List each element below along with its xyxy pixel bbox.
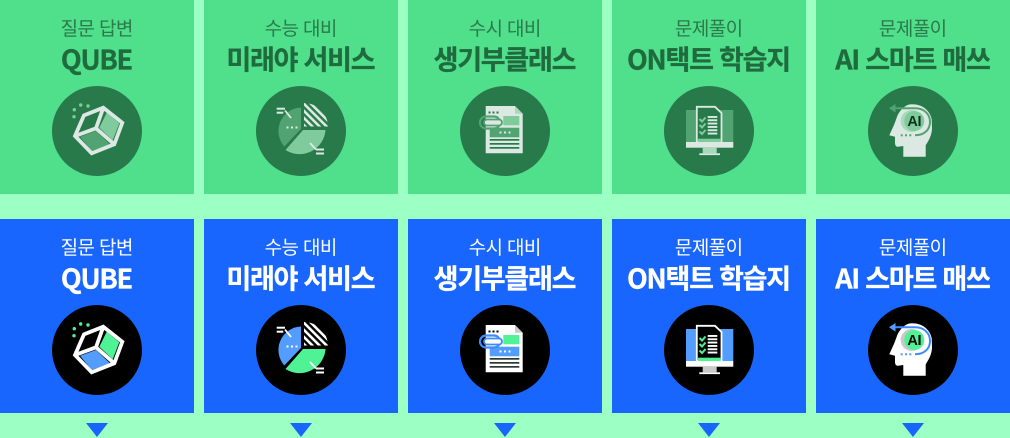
- heading: ON택트 학습지: [627, 258, 790, 296]
- icon: monitor with checklist: [664, 86, 754, 176]
- heading: 미래야 서비스: [226, 38, 375, 78]
- subtitle: 수능 대비: [265, 233, 337, 260]
- arrow: 미래야 서비스: [290, 423, 312, 437]
- heading: QUBE: [61, 38, 132, 78]
- bottom row: [0, 219, 1010, 413]
- subtitle: 문제풀이: [879, 233, 946, 260]
- panel: 생기부클래스 (green): [408, 0, 602, 194]
- top row: [0, 0, 1010, 194]
- icon: monitor with checklist: [664, 305, 754, 395]
- subtitle: 수시 대비: [469, 14, 541, 41]
- subtitle: 문제풀이: [879, 14, 946, 41]
- label: AI: AI: [907, 114, 922, 130]
- icon: pie chart: [256, 305, 346, 395]
- arrow: QUBE: [86, 423, 108, 437]
- icon: document with clip: [460, 305, 550, 395]
- arrow: AI 스마트 매쓰: [902, 423, 924, 437]
- icon: AI head: [868, 305, 958, 395]
- panel: QUBE (green): [0, 0, 194, 194]
- subtitle: 질문 답변: [61, 233, 133, 260]
- arrow: 생기부클래스: [494, 423, 516, 437]
- panel: QUBE (blue): [0, 219, 194, 413]
- subtitle: 질문 답변: [61, 14, 133, 41]
- heading: QUBE: [61, 258, 132, 296]
- panel: ON택트 학습지 (green): [612, 0, 806, 194]
- icon: pie chart: [256, 86, 346, 176]
- panel: AI 스마트 매쓰 (blue): [816, 219, 1010, 413]
- panel: 생기부클래스 (blue): [408, 219, 602, 413]
- heading: 미래야 서비스: [226, 258, 375, 296]
- icon: cube: [52, 305, 142, 395]
- subtitle: 문제풀이: [675, 233, 742, 260]
- icon: AI head: [868, 86, 958, 176]
- heading: 생기부클래스: [434, 258, 576, 296]
- subtitle: 문제풀이: [675, 14, 742, 41]
- arrow: ON택트 학습지: [698, 423, 720, 437]
- subtitle: 수능 대비: [265, 14, 337, 41]
- panel: ON택트 학습지 (blue): [612, 219, 806, 413]
- heading: 생기부클래스: [434, 38, 576, 78]
- panel: 미래야 서비스 (green): [204, 0, 398, 194]
- panel: AI 스마트 매쓰 (green): [816, 0, 1010, 194]
- icon: cube: [52, 86, 142, 176]
- label: AI: AI: [907, 333, 922, 349]
- icon: document with clip: [460, 86, 550, 176]
- subtitle: 수시 대비: [469, 233, 541, 260]
- heading: AI 스마트 매쓰: [834, 38, 990, 78]
- heading: AI 스마트 매쓰: [834, 258, 990, 296]
- panel: 미래야 서비스 (blue): [204, 219, 398, 413]
- heading: ON택트 학습지: [627, 38, 790, 78]
